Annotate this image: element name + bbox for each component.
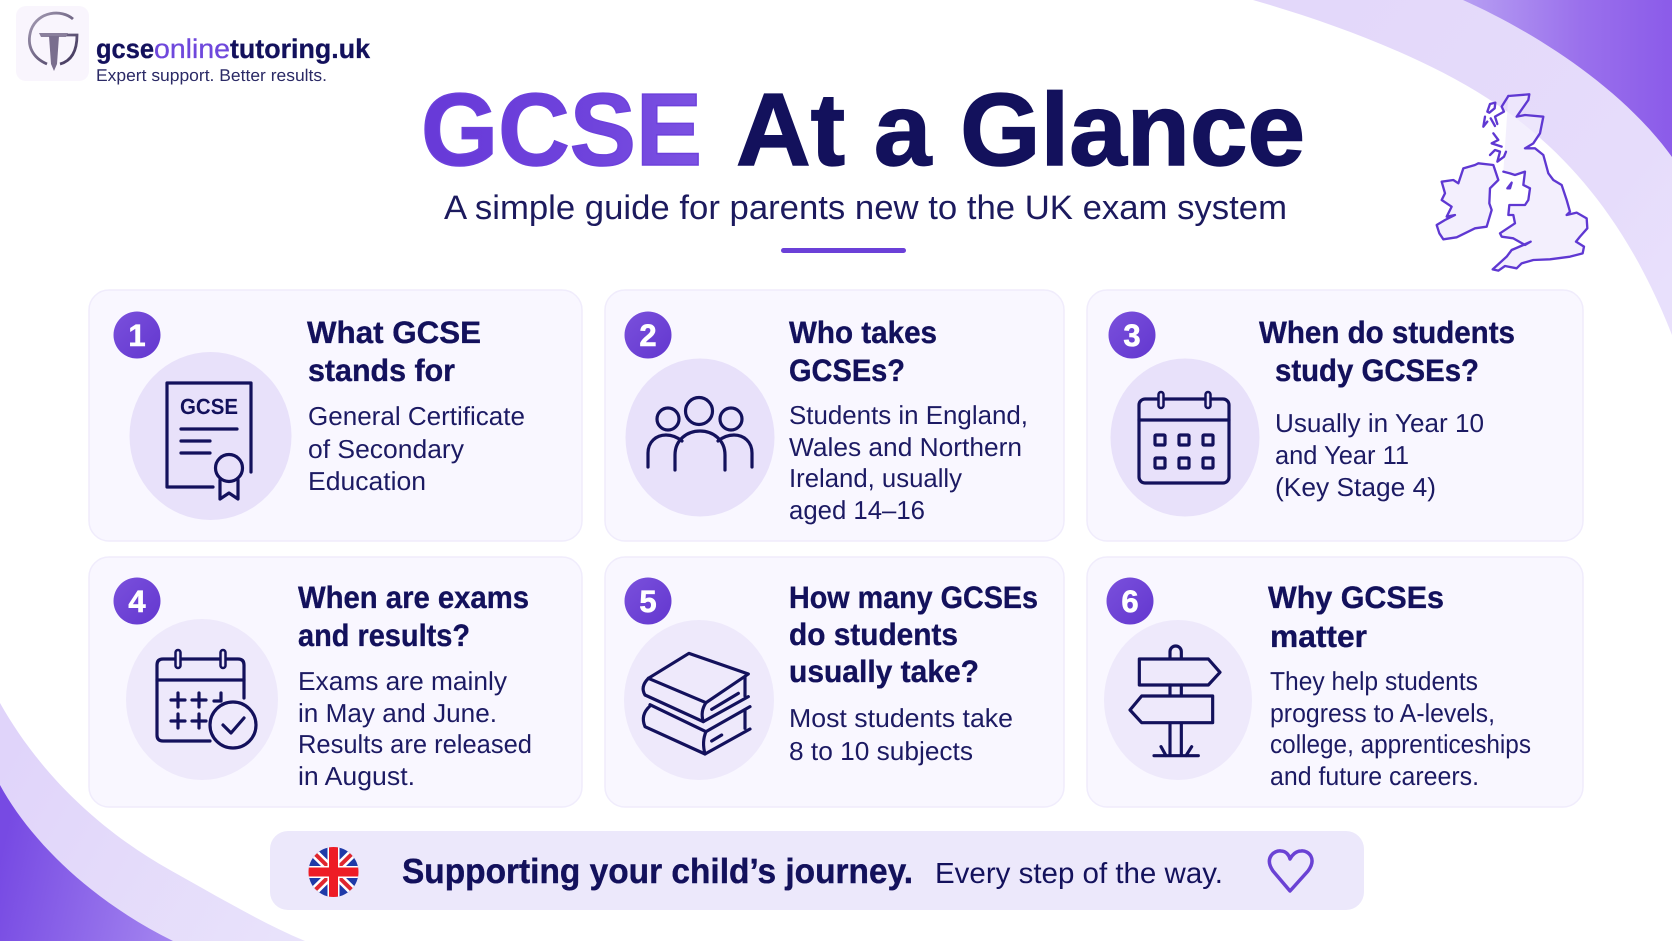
body text: and Year 11 <box>1275 440 1409 470</box>
icon: UK flag <box>308 847 359 897</box>
body text: progress to A-levels, <box>1270 698 1495 728</box>
icon circle 4 <box>126 619 278 780</box>
body text: college, apprenticeships <box>1270 729 1531 759</box>
body text: Results are released <box>298 729 532 759</box>
background swoosh: top right <box>1253 0 1672 335</box>
heading: usually take? <box>789 654 979 689</box>
brand name and tagline: gcse <box>96 34 154 64</box>
background swoosh: bottom left <box>0 703 305 941</box>
body text: Most students take <box>789 703 1013 733</box>
body text <box>1270 666 1531 791</box>
body text: in August. <box>298 761 415 791</box>
heading: Why GCSEs <box>1268 580 1444 615</box>
banner message: Every step of the way. <box>935 858 1223 890</box>
body text <box>298 666 532 791</box>
body text: and future careers. <box>1270 761 1479 791</box>
badge 2: 2 <box>639 318 657 353</box>
body text: of Secondary <box>308 434 464 464</box>
icon circle 6 <box>1104 620 1252 780</box>
title: At a Glance <box>736 72 1305 187</box>
brand name and tagline: Expert support. Better results. <box>96 66 327 85</box>
heading: do students <box>789 617 958 652</box>
heading: Who takes <box>789 315 937 350</box>
heading: What GCSE <box>307 315 481 350</box>
badge 6: 6 <box>1121 584 1139 619</box>
badge 4 <box>114 578 160 624</box>
footer banner <box>270 831 1364 910</box>
brand name and tagline: tutoring.uk <box>230 34 371 64</box>
icon circle 5 <box>624 620 774 780</box>
body text: General Certificate <box>308 401 525 431</box>
heading <box>1259 315 1515 388</box>
title <box>421 72 1305 187</box>
icon circle 1 <box>130 352 292 520</box>
heading <box>307 315 481 388</box>
heading <box>789 580 1038 689</box>
body text: Exams are mainly <box>298 666 507 696</box>
icon: certificate <box>167 383 251 499</box>
heading: How many GCSEs <box>789 580 1038 615</box>
body text: Wales and Northern <box>789 432 1022 462</box>
icon: signpost <box>1130 646 1220 756</box>
icon: stack of books <box>643 653 750 754</box>
icon: UK and Ireland map outline <box>1437 94 1587 271</box>
heading: GCSEs? <box>789 353 905 388</box>
heading <box>789 315 937 388</box>
icon circle 2 <box>626 358 774 516</box>
icon circle 3 <box>1110 358 1260 516</box>
heading: and results? <box>298 618 470 653</box>
badge 6 <box>1106 578 1154 624</box>
body text: They help students <box>1270 666 1478 696</box>
heading <box>1268 580 1444 654</box>
heading: study GCSEs? <box>1275 353 1479 388</box>
panel: When are exams and results <box>89 557 582 807</box>
heading: When do students <box>1259 315 1515 350</box>
icon: certificate: GCSE <box>180 394 238 419</box>
body text: aged 14–16 <box>789 495 925 525</box>
badge 5: 5 <box>639 584 657 619</box>
icon: calendar with check <box>157 650 256 748</box>
body text: (Key Stage 4) <box>1275 472 1436 502</box>
icon: heart <box>1269 851 1312 891</box>
body text: in May and June. <box>298 698 497 728</box>
icon: group of people <box>648 398 752 470</box>
badge 5 <box>624 578 672 624</box>
body text: Ireland, usually <box>789 463 962 493</box>
heading: matter <box>1270 619 1367 654</box>
panel: Why GCSEs matter <box>1087 557 1583 807</box>
banner bold message: Supporting your child’s journey. <box>402 852 913 891</box>
panel: Who takes GCSEs <box>605 290 1064 541</box>
subtitle: A simple guide for parents new to the UK exam system <box>444 189 1287 227</box>
badge 1: 1 <box>128 318 146 353</box>
badge 4: 4 <box>128 584 146 619</box>
badge 2 <box>624 312 672 358</box>
title: GCSE <box>421 72 702 187</box>
heading: When are exams <box>298 580 529 615</box>
heading <box>298 580 529 653</box>
brand name and tagline <box>96 34 371 85</box>
body text: 8 to 10 subjects <box>789 736 973 766</box>
badge 3 <box>1108 312 1156 358</box>
body text: Students in England, <box>789 400 1028 430</box>
panel: What GCSE stands for <box>89 290 582 541</box>
body text <box>789 703 1013 766</box>
badge 3: 3 <box>1123 318 1141 353</box>
icon: calendar <box>1139 392 1229 483</box>
panel: When do students study GCSEs <box>1087 290 1583 541</box>
title underline <box>781 248 906 253</box>
panel: How many GCSEs <box>605 557 1064 807</box>
body text <box>1275 408 1484 502</box>
body text <box>308 401 525 496</box>
brand name and tagline: online <box>154 34 230 64</box>
badge 1 <box>114 312 160 358</box>
body text <box>789 400 1028 525</box>
logo: GT monogram <box>16 6 89 81</box>
body text: Education <box>308 466 426 496</box>
heading: stands for <box>308 353 455 388</box>
body text: Usually in Year 10 <box>1275 408 1484 438</box>
